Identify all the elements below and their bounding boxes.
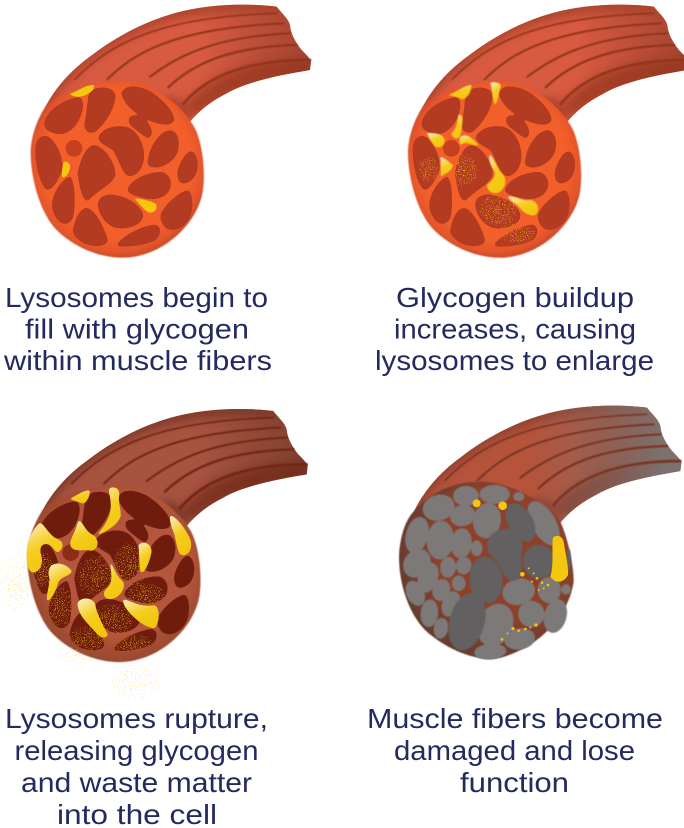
cross-section	[399, 482, 574, 659]
cross-section	[31, 81, 204, 258]
glycogen deposits	[27, 487, 191, 638]
caption: stage 1: Lysosomes begin to	[5, 282, 268, 313]
muscle tail	[411, 0, 684, 127]
muscle tail	[33, 0, 317, 127]
illustration: stage 3 ruptured lysosomes	[0, 404, 313, 710]
muscle tail	[30, 404, 313, 531]
dark grey fibers	[444, 499, 570, 653]
caption: stage 1	[3, 282, 272, 376]
fiber bundles	[33, 491, 194, 650]
cross-section	[408, 81, 581, 258]
glycogen speckles	[35, 544, 164, 652]
caption: stage 3: and waste matter	[21, 767, 252, 798]
grey damaged fibers	[399, 486, 570, 660]
fiber bundles	[413, 87, 575, 246]
caption: stage 1: within muscle fibers	[3, 345, 272, 376]
caption: stage 2	[375, 282, 654, 376]
caption: stage 4: function	[460, 767, 569, 798]
caption: stage 2: increases, causing	[394, 314, 636, 344]
caption: stage 3	[5, 703, 268, 828]
caption: stage 4	[367, 703, 663, 798]
caption: stage 4: damaged and lose	[394, 735, 635, 766]
illustration: stage 4 damaged fibers	[399, 401, 684, 660]
glycogen deposits	[427, 82, 538, 215]
escaped glycogen dust	[0, 540, 178, 710]
illustration: stage 1 muscle fiber	[31, 0, 317, 258]
caption: stage 1: fill with glycogen	[25, 314, 249, 344]
fiber bundles	[36, 87, 197, 246]
glycogen deposits	[62, 86, 156, 212]
caption: stage 2: Glycogen buildup	[396, 282, 634, 313]
caption: stage 2: lysosomes to enlarge	[375, 345, 654, 376]
glycogen speckles	[418, 154, 534, 242]
muscle tail	[404, 401, 684, 528]
caption: stage 3: Lysosomes rupture,	[5, 703, 268, 734]
caption: stage 3: releasing glycogen	[14, 735, 258, 766]
caption: stage 4: Muscle fibers become	[367, 703, 663, 734]
cross-section	[27, 486, 201, 662]
remaining glycogen	[473, 499, 568, 641]
illustration: stage 2 enlarged lysosomes	[408, 0, 684, 258]
